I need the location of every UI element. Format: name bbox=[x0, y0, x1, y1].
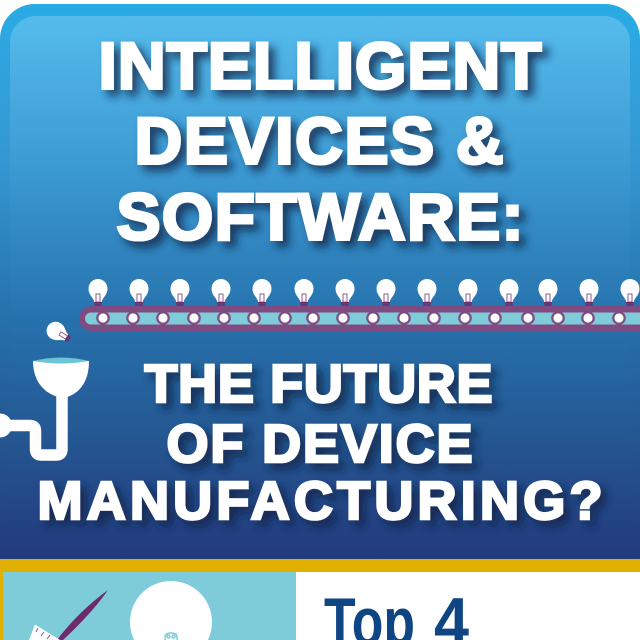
title: top part bbox=[98, 28, 542, 254]
title: bottom part: OF DEVICE bbox=[166, 414, 472, 474]
icon: small teal mark bbox=[165, 633, 177, 640]
panel: white text bbox=[296, 572, 640, 640]
row of light bulbs on the belt bbox=[88, 279, 640, 306]
icon: paint brush bbox=[29, 590, 108, 640]
conveyor belt bbox=[79, 306, 640, 331]
title: top part: SOFTWARE: bbox=[116, 180, 524, 254]
title: top part: DEVICES & bbox=[134, 104, 504, 178]
icon: falling light bulb bbox=[43, 318, 74, 347]
title: bottom part: THE FUTURE bbox=[144, 354, 492, 414]
icon: white circle bbox=[130, 581, 212, 640]
panel: teal illustration bbox=[0, 572, 296, 640]
title: bottom part bbox=[38, 354, 602, 531]
title: bottom part: MANUFACTURING? bbox=[38, 471, 602, 531]
gold divider band bbox=[0, 559, 640, 572]
title: top part: INTELLIGENT bbox=[98, 28, 542, 102]
icon: funnel and pipe bbox=[0, 358, 89, 455]
